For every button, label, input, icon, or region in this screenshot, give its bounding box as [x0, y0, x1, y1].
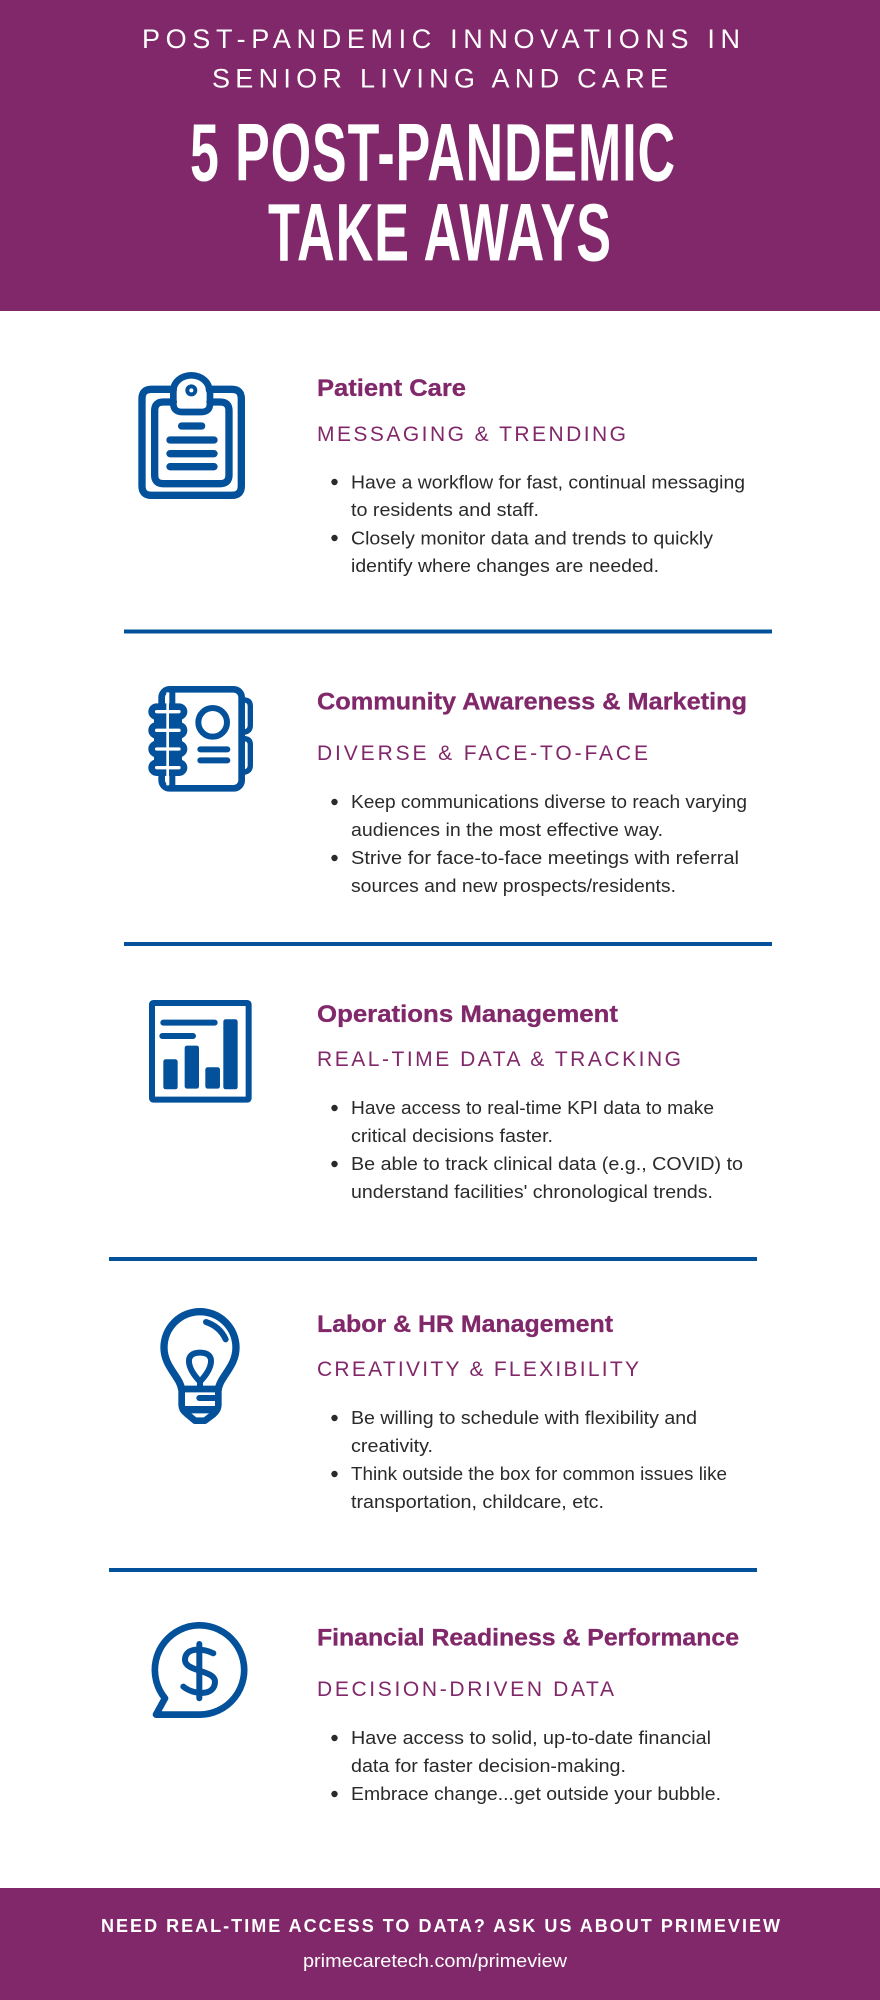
bullet list: [331, 791, 747, 896]
icon: bar chart report: [152, 1003, 249, 1100]
heading: Labor & HR Management: [317, 1311, 613, 1338]
bullet list: [331, 472, 745, 576]
icon: dollar speech bubble: [155, 1625, 244, 1715]
bullet list: creativity.: [351, 1435, 433, 1456]
bullet list: audiences in the most effective way.: [351, 819, 663, 840]
heading: Community Awareness & Marketing: [317, 688, 747, 716]
icon: spiral notebook: [152, 689, 250, 788]
subheading: DIVERSE & FACE-TO-FACE: [317, 742, 648, 765]
bullet list: Embrace change...get outside your bubble.: [351, 1783, 721, 1804]
bullet list: sources and new prospects/residents.: [351, 875, 676, 896]
bullet list: transportation, childcare, etc.: [351, 1491, 604, 1512]
bullet list: Keep communications diverse to reach varying: [351, 791, 747, 812]
panel: community awareness and marketing: [152, 688, 747, 896]
bullet list: Have a workflow for fast, continual messaging: [351, 472, 745, 492]
bullet list: Be able to track clinical data (e.g., COVID) to: [351, 1153, 743, 1174]
heading: Patient Care: [317, 375, 466, 402]
header banner: [0, 0, 880, 311]
icon: clipboard: [142, 375, 241, 495]
panel: patient care: [142, 375, 745, 576]
bullet list: data for faster decision-making.: [351, 1755, 626, 1776]
call to action: NEED REAL-TIME ACCESS TO DATA? ASK US ABOUT PRIMEVIEW: [101, 1916, 780, 1936]
heading: Operations Management: [317, 1001, 618, 1028]
bullet list: Be willing to schedule with flexibility and: [351, 1407, 697, 1428]
bullet list: Have access to solid, up-to-date financial: [351, 1727, 711, 1748]
subtitle: [142, 24, 740, 94]
bullet list: [331, 1407, 727, 1512]
bullet list: understand facilities' chronological trends.: [351, 1181, 713, 1202]
icon: light bulb: [164, 1312, 236, 1421]
bullet list: Think outside the box for common issues like: [351, 1463, 727, 1484]
footer banner: [0, 1888, 880, 2000]
subheading: CREATIVITY & FLEXIBILITY: [317, 1358, 639, 1381]
bullet list: [331, 1097, 743, 1202]
bullet list: identify where changes are needed.: [351, 555, 659, 576]
bullet list: Have access to real-time KPI data to make: [351, 1097, 714, 1118]
bullet list: critical decisions faster.: [351, 1125, 553, 1146]
subheading: DECISION-DRIVEN DATA: [317, 1678, 614, 1701]
panel: financial readiness and performance: [155, 1624, 739, 1804]
bullet list: to residents and staff.: [351, 499, 539, 520]
bullet list: Closely monitor data and trends to quickly: [351, 528, 714, 548]
panel: operations management: [152, 1001, 743, 1202]
bullet list: [331, 1727, 721, 1804]
panel: labor and HR management: [164, 1311, 727, 1512]
subtitle: SENIOR LIVING AND CARE: [212, 64, 668, 94]
bullet list: Strive for face-to-face meetings with referral: [351, 847, 739, 868]
website link: primecaretech.com/primeview: [303, 1950, 568, 1971]
subtitle: POST-PANDEMIC INNOVATIONS IN: [142, 24, 740, 54]
subheading: MESSAGING & TRENDING: [317, 423, 626, 446]
subheading: REAL-TIME DATA & TRACKING: [317, 1048, 681, 1071]
main title: [190, 108, 676, 278]
main title: TAKE AWAYS: [268, 188, 612, 278]
heading: Financial Readiness & Performance: [317, 1624, 739, 1652]
